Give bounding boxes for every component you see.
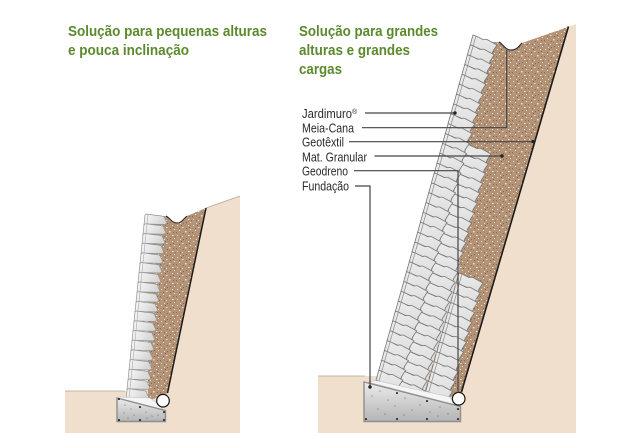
legend labels: Geotêxtil — [302, 136, 344, 150]
leader: Fundacao — [355, 186, 372, 389]
legend labels — [302, 107, 367, 194]
half-channel right — [499, 42, 522, 50]
drain pipe left — [157, 394, 169, 407]
foundation right — [364, 382, 460, 422]
legend labels: Fundação — [302, 180, 349, 194]
terrain: right soil — [318, 24, 576, 433]
panel: tall wall solution — [318, 24, 576, 433]
wedge right — [368, 380, 456, 405]
panel: small wall solution — [65, 196, 240, 433]
title: small wall: Solução para pequenas alturas — [68, 23, 267, 40]
geotextile right — [462, 26, 568, 392]
wall backing between stacks — [398, 147, 466, 394]
title: small wall: e pouca inclinação — [68, 42, 189, 59]
granular material right — [400, 27, 568, 402]
middle stack — [400, 144, 492, 391]
title: tall wall: cargas — [299, 61, 342, 78]
leader: Meia-Cana — [362, 50, 507, 128]
geotextile left — [168, 208, 206, 393]
ground surface lines — [65, 196, 240, 391]
outer stack — [373, 35, 497, 399]
ground surface line right — [318, 375, 365, 377]
stack joint dots — [427, 275, 459, 388]
leader: Jardimuro — [365, 111, 457, 115]
drain pipe right — [452, 392, 465, 405]
block wall left — [126, 214, 167, 399]
block wall right — [373, 35, 497, 410]
foundation left — [117, 398, 166, 422]
legend labels: Jardimuro — [302, 107, 352, 121]
wedge left — [117, 397, 162, 410]
legend labels: Mat. Granular — [302, 150, 367, 164]
terrain: left soil — [65, 196, 240, 433]
half-channel left — [166, 216, 187, 223]
granular material left — [148, 208, 206, 401]
legend labels: Geodreno — [302, 165, 348, 179]
legend labels: Meia-Cana — [302, 122, 354, 136]
title: tall wall: alturas e grandes — [299, 42, 410, 59]
title: tall wall: Solução para grandes — [299, 23, 438, 40]
leader: Mat. Granular — [374, 154, 504, 158]
leader: Geodreno — [354, 171, 458, 393]
legend labels: ® — [352, 108, 358, 116]
leader: Geotextil — [349, 140, 535, 143]
inner stack — [425, 272, 484, 396]
